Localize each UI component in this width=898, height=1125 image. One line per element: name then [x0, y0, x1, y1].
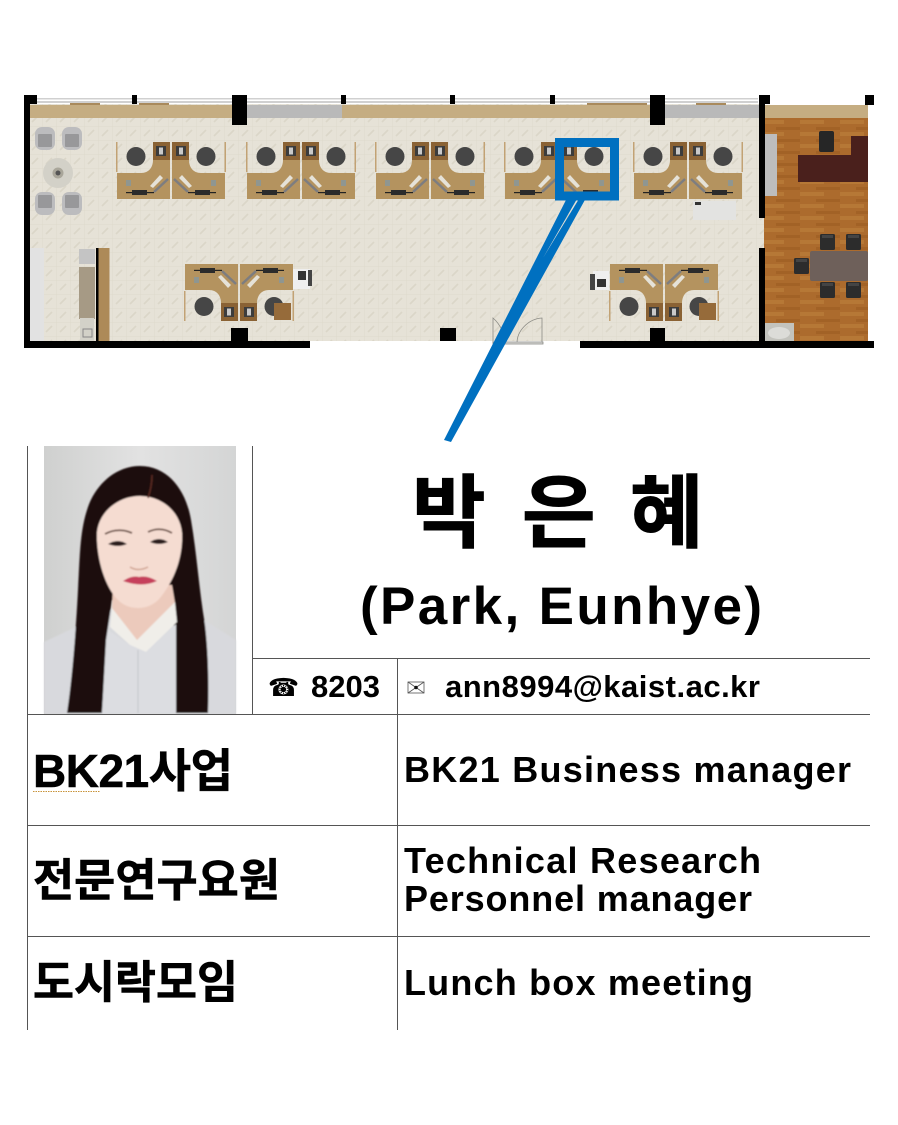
row 1: BK21: BK21사업	[33, 745, 233, 797]
row 3: lunch box meeting	[33, 957, 753, 1008]
row 1: BK21	[33, 745, 851, 797]
collar	[110, 602, 177, 652]
shirt	[44, 610, 236, 714]
walls and columns	[24, 95, 874, 348]
row 3: lunch box meeting: Lunch box meeting	[404, 962, 753, 1003]
floor plan	[24, 95, 874, 348]
eyebrows	[105, 530, 132, 534]
bottom workstation clusters	[184, 264, 719, 321]
eyes	[108, 541, 127, 546]
phone extension: ☎	[268, 673, 299, 702]
top window rail	[37, 98, 758, 103]
lips	[123, 576, 157, 584]
email address: ann8994@kaist.ac.kr	[445, 669, 760, 704]
storage band along the top wall	[30, 103, 759, 118]
executive desk	[798, 131, 868, 182]
name in English: (Park, Eunhye)	[360, 577, 762, 636]
entrance double door	[493, 318, 543, 344]
printers and side table	[293, 201, 736, 290]
highlight box and pointer	[444, 142, 614, 442]
row 2: technical research personnel	[33, 840, 761, 919]
row 2: technical research personnel: Personnel manager	[404, 878, 752, 919]
shirt front	[102, 624, 176, 713]
hair	[67, 466, 208, 713]
executive office	[764, 105, 868, 341]
kitchenette	[30, 248, 110, 341]
neck	[112, 585, 175, 642]
row 2: technical research personnel: 전문연구요원	[33, 855, 280, 906]
row 3: lunch box meeting: 도시락모임	[33, 957, 238, 1008]
nose	[130, 567, 148, 570]
row 1: BK21: BK21 Business manager	[404, 749, 851, 790]
lounge table and armchairs	[35, 127, 82, 215]
top workstation clusters	[116, 142, 743, 199]
portrait photo	[44, 446, 236, 714]
phone extension	[268, 669, 380, 704]
name in Korean: 박 은 혜	[412, 469, 704, 558]
face	[97, 496, 182, 608]
table grid	[27, 446, 870, 1030]
phone extension: 8203	[311, 669, 380, 704]
row 2: technical research personnel: Technical Research	[404, 840, 761, 881]
meeting table and chairs	[794, 234, 868, 298]
